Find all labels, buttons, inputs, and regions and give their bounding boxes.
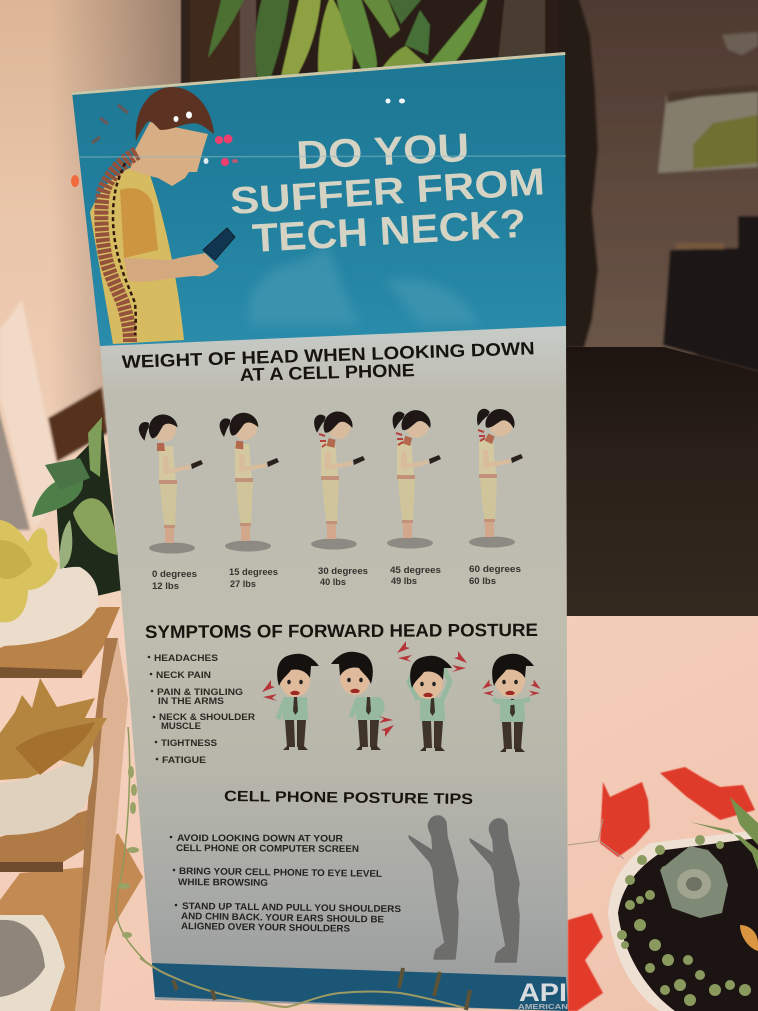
shirt bbox=[90, 168, 184, 344]
man: headache bbox=[397, 641, 467, 751]
chart: posture figures bbox=[139, 400, 523, 554]
panel: sign body bbox=[100, 325, 568, 1011]
list: tips: STAND UP TALL AND PULL YOU SHOULDERS bbox=[182, 901, 401, 915]
figure: 45 degrees bbox=[386, 403, 441, 548]
hair bbox=[136, 87, 214, 142]
list: tips: ALIGNED OVER YOUR SHOULDERS bbox=[181, 921, 350, 935]
decoration: red maple leaves bbox=[568, 767, 755, 1011]
list: symptoms bbox=[148, 653, 255, 766]
man: neck pain bbox=[262, 654, 319, 750]
chart labels: degrees and weight: 60 lbs bbox=[469, 576, 496, 587]
list: symptoms: MUSCLE bbox=[161, 721, 201, 732]
glare spots bbox=[71, 98, 566, 187]
phone bbox=[203, 228, 235, 260]
panel: blue header bbox=[72, 52, 566, 346]
list: symptoms: IN THE ARMS bbox=[158, 696, 224, 707]
list: tips: BRING YOUR CELL PHONE TO EYE LEVEL bbox=[179, 866, 382, 880]
heading: weight of head: AT A CELL PHONE bbox=[240, 360, 415, 385]
pot 1 bbox=[0, 567, 98, 646]
decoration: potted string-of-pearls plant bbox=[608, 797, 758, 1011]
chart labels: degrees and weight bbox=[152, 564, 521, 592]
chart labels: degrees and weight: 60 degrees bbox=[469, 564, 521, 575]
arm bbox=[124, 253, 219, 282]
vine across footer bbox=[140, 958, 470, 1010]
leaves bbox=[208, 0, 246, 58]
list: tips bbox=[170, 833, 401, 935]
reflection bbox=[248, 247, 480, 325]
figure: 60 degrees bbox=[468, 400, 523, 548]
heading: weight of head: WEIGHT OF HEAD WHEN LOOKING DOWN bbox=[121, 338, 535, 372]
panel: blue footer bbox=[152, 963, 568, 1011]
background: dark floor bbox=[566, 347, 758, 618]
illustration: man with spine looking at phone bbox=[90, 87, 235, 344]
list: tips: CELL PHONE OR COMPUTER SCREEN bbox=[176, 843, 359, 855]
figure: 15 degrees bbox=[217, 410, 279, 552]
list: symptoms: TIGHTNESS bbox=[161, 738, 217, 749]
post bbox=[75, 638, 128, 1011]
background: left foliage plant bbox=[32, 417, 122, 600]
man: back pain bbox=[331, 652, 394, 750]
chart labels: degrees and weight: 49 lbs bbox=[391, 576, 417, 587]
list: symptoms: PAIN & TINGLING bbox=[157, 687, 243, 698]
title: TECH NECK? bbox=[251, 202, 527, 261]
list: tips: AVOID LOOKING DOWN AT YOUR bbox=[177, 833, 343, 845]
heading: tips: CELL PHONE POSTURE TIPS bbox=[224, 788, 473, 808]
chart labels: degrees and weight: 15 degrees bbox=[229, 567, 278, 578]
succulent yellow bbox=[0, 520, 58, 622]
chart labels: degrees and weight: 45 degrees bbox=[390, 565, 441, 576]
logo: API: API bbox=[519, 979, 567, 1007]
background: shelf with potted succulents bbox=[0, 520, 143, 1011]
list: symptoms: NECK & SHOULDER bbox=[159, 712, 255, 723]
figure: 0 degrees bbox=[139, 414, 203, 554]
logo: API: AMERICAN bbox=[518, 1004, 568, 1011]
chart labels: degrees and weight: 40 lbs bbox=[320, 577, 346, 588]
background: dark backdrop and top plant bbox=[181, 0, 581, 110]
list: tips: AND CHIN BACK. YOUR EARS SHOULD BE bbox=[181, 911, 384, 926]
succulent orange bbox=[0, 678, 107, 780]
chart labels: degrees and weight: 0 degrees bbox=[152, 569, 197, 580]
pot 2 bbox=[0, 747, 93, 835]
chart labels: degrees and weight: 27 lbs bbox=[230, 579, 256, 590]
chart labels: degrees and weight: 12 lbs bbox=[152, 581, 179, 592]
shelf board one bbox=[0, 607, 120, 677]
heading: weight of head bbox=[121, 338, 535, 385]
sign: card and header bbox=[72, 52, 568, 1011]
list: symptoms: NECK PAIN bbox=[156, 670, 211, 681]
illustration: four men showing symptoms bbox=[262, 641, 541, 752]
list: symptoms: HEADACHES bbox=[154, 653, 218, 664]
silhouette: bad posture bbox=[409, 816, 458, 959]
heading: symptoms: SYMPTOMS OF FORWARD HEAD POSTURE bbox=[145, 620, 538, 642]
title bbox=[229, 126, 546, 261]
title: SUFFER FROM bbox=[229, 161, 546, 223]
bottom board bbox=[0, 833, 143, 1011]
figure: 30 degrees bbox=[309, 406, 365, 550]
head and neck bbox=[130, 122, 208, 186]
pot 3 bbox=[0, 915, 65, 1011]
illustration: posture silhouettes bbox=[409, 816, 519, 962]
background: table and lower wall bbox=[0, 616, 758, 1011]
background: vine bbox=[116, 727, 147, 963]
title: DO YOU bbox=[295, 126, 470, 178]
list: symptoms: FATIGUE bbox=[162, 755, 206, 766]
silhouette: good posture bbox=[470, 819, 519, 962]
rosette succulent bbox=[660, 846, 728, 918]
list: tips: WHILE BROWSING bbox=[178, 877, 268, 889]
man: shoulder tightness bbox=[482, 654, 541, 752]
background: room wall upper left bbox=[0, 0, 195, 635]
decoration: fairy light wire bbox=[568, 819, 624, 859]
spine bbox=[101, 153, 137, 342]
chart labels: degrees and weight: 30 degrees bbox=[318, 566, 368, 577]
sleeve bbox=[120, 188, 158, 258]
background: right wall with picture, lamp and cabinet bbox=[560, 0, 758, 372]
shelf board two bbox=[0, 810, 88, 872]
